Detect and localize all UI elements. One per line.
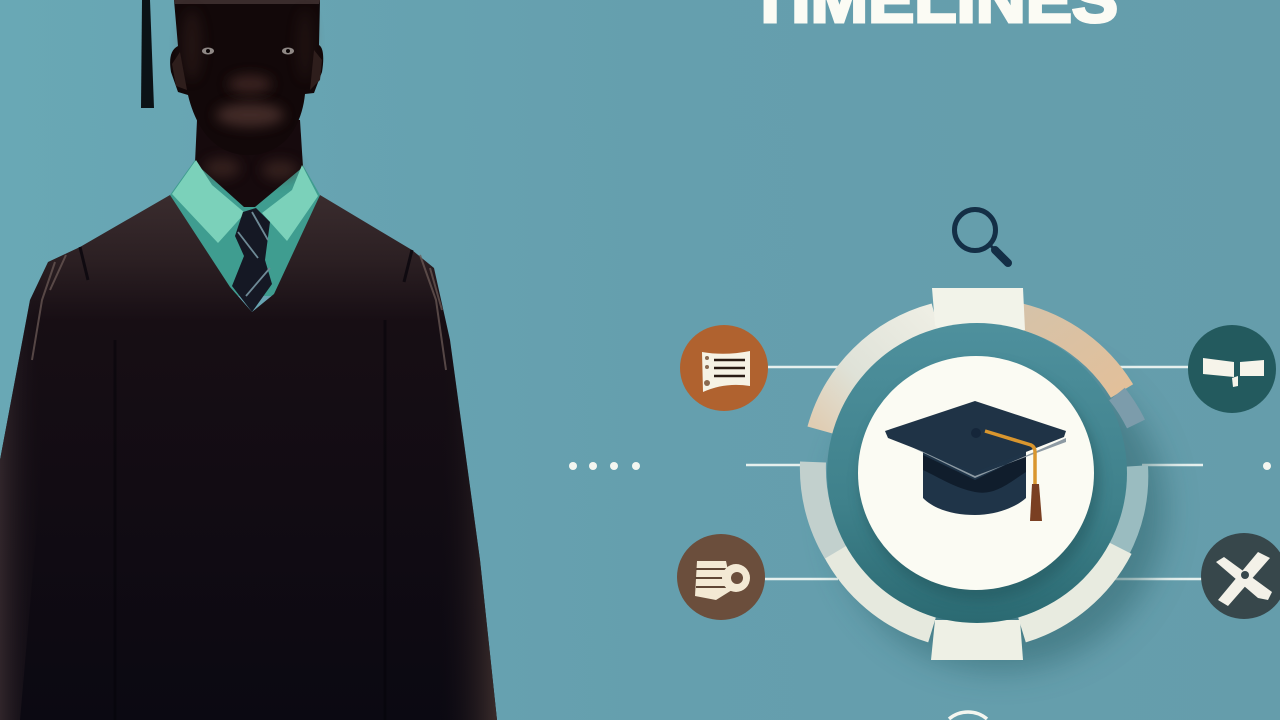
head <box>170 0 323 155</box>
graduation cap icon <box>885 401 1066 521</box>
ring segment: left pale grey <box>813 462 836 552</box>
white disc <box>858 356 1094 590</box>
right dot <box>1263 462 1271 470</box>
ring segment: upper left <box>820 316 935 430</box>
gown <box>0 195 497 720</box>
neck <box>195 120 303 207</box>
teal ring <box>827 323 1127 623</box>
central hub <box>813 288 1165 670</box>
graduate figure <box>0 0 497 720</box>
collar <box>172 160 318 243</box>
top tab <box>932 288 1025 332</box>
icon: checklist on orange circle <box>680 325 768 411</box>
ring segment: right pale teal <box>1118 466 1136 550</box>
ring segment: grey blue <box>1117 394 1136 424</box>
ring segment: lower right cream <box>1022 548 1120 630</box>
bottom partial icon <box>949 712 987 719</box>
bottom tab <box>931 620 1023 660</box>
shirt <box>170 160 320 296</box>
icon: diploma on teal circle <box>1188 325 1276 413</box>
icon: coins on brown circle <box>677 534 765 620</box>
connector lines <box>746 367 1203 579</box>
necktie <box>232 208 272 312</box>
inner disc shadow <box>860 364 1100 600</box>
ring segment: tan <box>1019 316 1122 391</box>
ring segment: lower left cream <box>834 548 932 630</box>
left dotted leader <box>569 462 640 470</box>
cap tassel <box>141 0 154 108</box>
icon: crossed tools on dark circle <box>1201 533 1280 619</box>
magnifier icon <box>954 210 1008 263</box>
hub shadow <box>835 350 1165 670</box>
